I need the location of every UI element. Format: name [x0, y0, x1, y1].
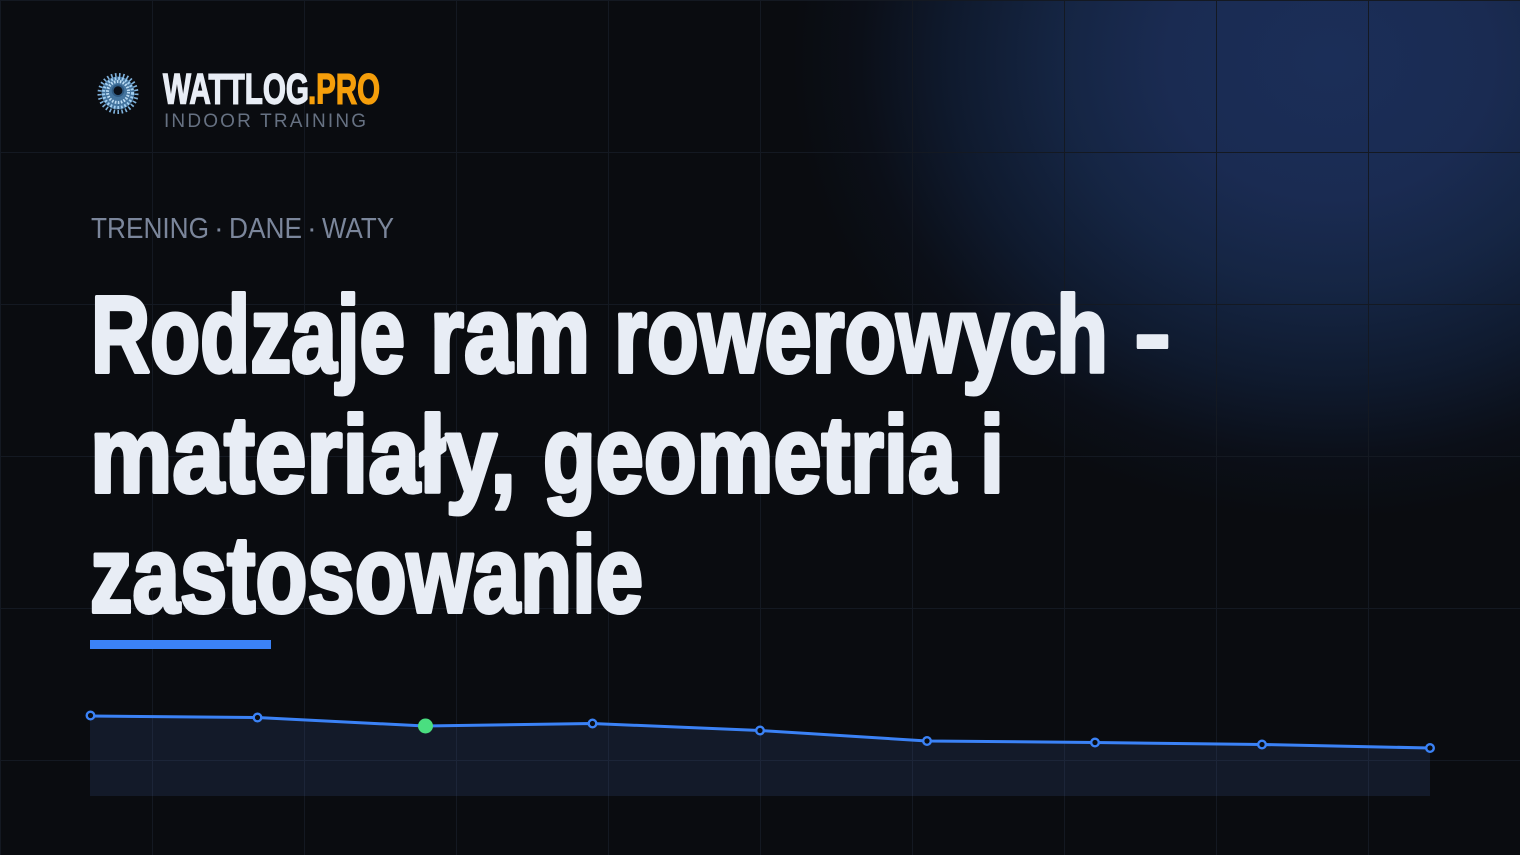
line chart [87, 712, 1434, 796]
chart data points [87, 712, 1434, 752]
title: Rodzaje [91, 274, 405, 396]
title: ram [430, 274, 590, 396]
title: – [1136, 273, 1169, 395]
title [90, 273, 1169, 636]
brand name: WATTLOG [163, 65, 309, 113]
brand name: .PRO [308, 65, 380, 113]
title: i [980, 394, 1004, 516]
eyebrow: TRENING [91, 213, 209, 245]
eyebrow: · [214, 213, 224, 245]
title underline accent [90, 640, 271, 649]
title: materiały, [90, 394, 516, 516]
icon: cassette sprocket logo [100, 75, 136, 112]
brand tagline: INDOOR TRAINING [164, 111, 366, 132]
eyebrow: DANE [229, 213, 302, 245]
title: zastosowanie [90, 514, 643, 636]
chart line [90, 716, 1430, 748]
chart area fill [90, 716, 1430, 796]
eyebrow: · [307, 213, 317, 245]
title: geometria [543, 394, 957, 516]
eyebrow: WATY [322, 213, 394, 245]
highlighted data point [418, 718, 433, 734]
title: rowerowych [614, 274, 1108, 396]
eyebrow [91, 213, 394, 245]
